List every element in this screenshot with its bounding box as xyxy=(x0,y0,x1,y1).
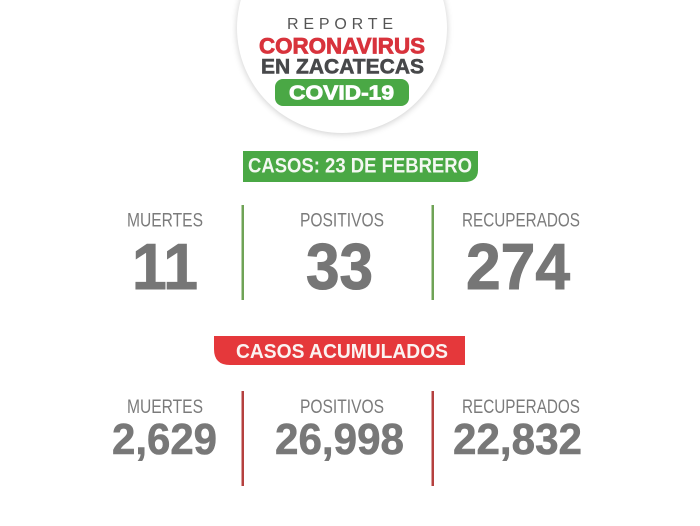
heading: casos 23 de febrero: CASOS: 23 DE FEBRERO xyxy=(248,154,472,178)
logo: covid-19 pill: COVID-19 xyxy=(289,82,394,104)
daily stat: muertes: 11 xyxy=(132,230,198,303)
cumulative stat: muertes: MUERTES xyxy=(127,397,203,418)
divider xyxy=(432,205,434,300)
daily stat: recuperados: RECUPERADOS xyxy=(462,210,580,232)
cumulative stat: recuperados: 22,832 xyxy=(453,415,582,464)
daily stat: positivos: POSITIVOS xyxy=(300,210,384,232)
logo: covid-19 pill xyxy=(275,79,409,106)
heading: casos acumulados: CASOS ACUMULADOS xyxy=(236,341,448,363)
heading: casos 23 de febrero xyxy=(243,151,478,182)
daily stat: muertes: MUERTES xyxy=(127,210,203,232)
divider xyxy=(242,205,244,300)
daily stat: positivos: 33 xyxy=(306,230,373,303)
logo badge xyxy=(237,0,447,134)
divider xyxy=(432,391,434,486)
cumulative stat: muertes: 2,629 xyxy=(112,415,217,464)
divider xyxy=(242,391,244,486)
cumulative stat: recuperados: RECUPERADOS xyxy=(462,397,580,418)
cumulative stat: positivos: POSITIVOS xyxy=(300,397,384,418)
logo: reporte: REPORTE xyxy=(287,16,393,33)
daily stat: recuperados: 274 xyxy=(466,230,570,303)
logo: en zacatecas: EN ZACATECAS xyxy=(261,54,424,78)
cumulative stat: positivos: 26,998 xyxy=(275,415,404,464)
logo: coronavirus: CORONAVIRUS xyxy=(259,34,425,58)
heading: casos acumulados xyxy=(214,336,465,365)
daily stat: positivos xyxy=(300,210,384,303)
